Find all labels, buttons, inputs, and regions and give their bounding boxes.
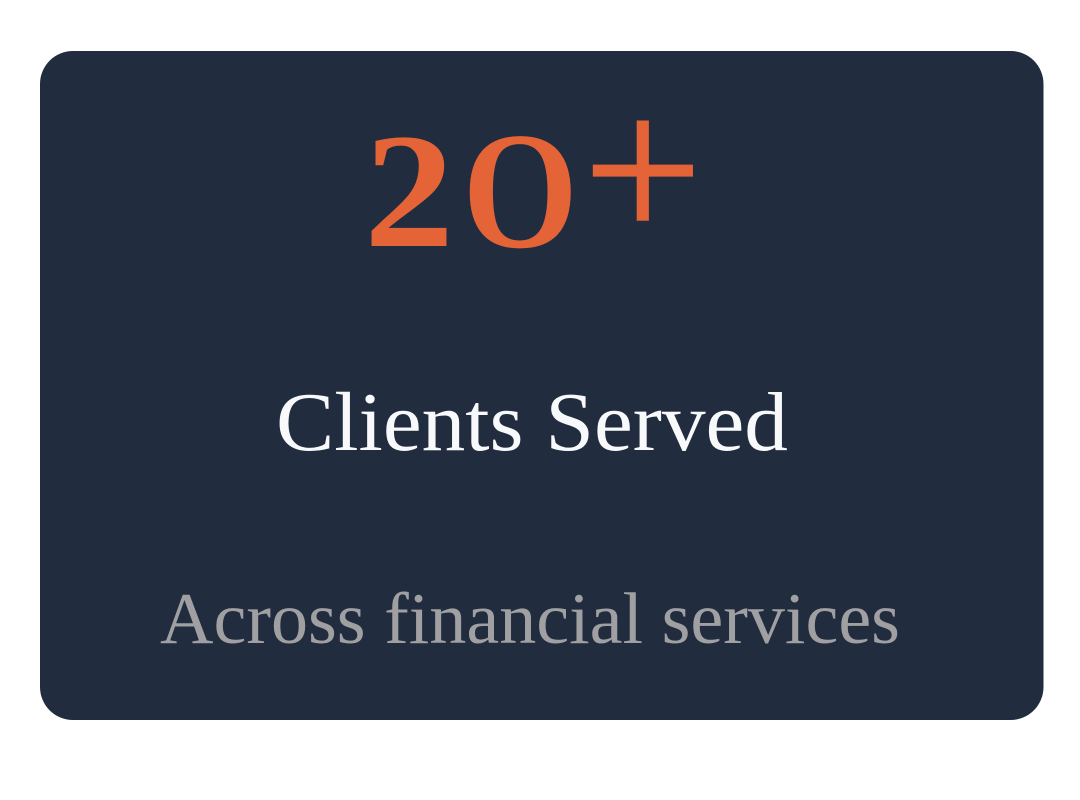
digit 0: 0 (462, 100, 578, 282)
panel: dark navy card (40, 51, 1044, 720)
subtext: Across financial services: Across financial services (160, 578, 900, 659)
big stat number: 20+ (364, 52, 703, 287)
heading: Clients Served: Clients Served (276, 376, 788, 469)
digit 2: 2 (364, 100, 454, 282)
plus sign: + (583, 52, 703, 287)
